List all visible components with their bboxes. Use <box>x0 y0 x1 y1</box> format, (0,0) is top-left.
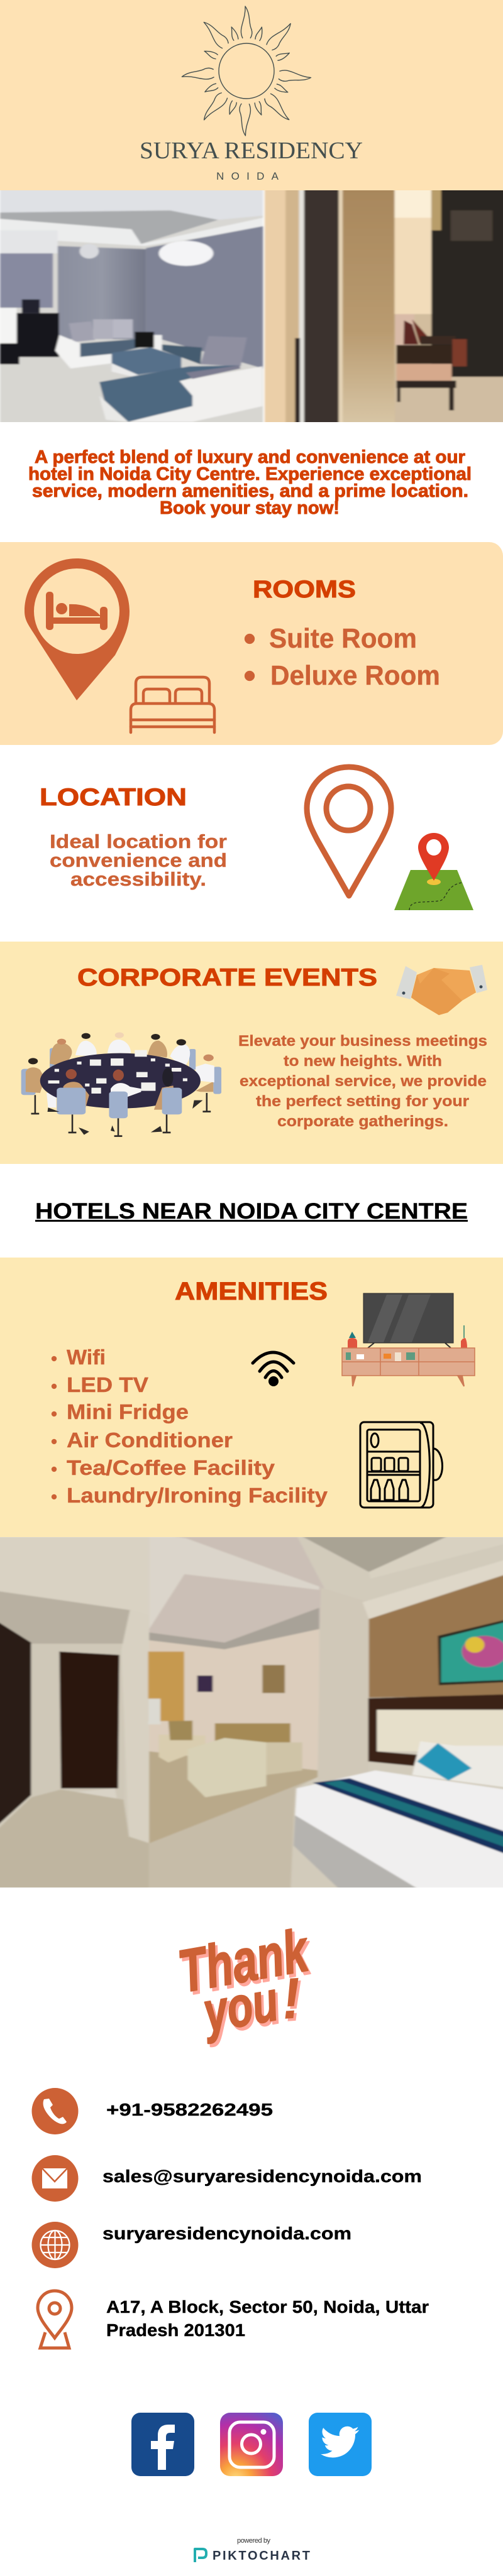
amenities list: Tea/Coffee Facility <box>67 1456 275 1479</box>
intro paragraph: hotel in Noida City Centre. Experience exceptional <box>28 464 472 484</box>
contact: phone: +91-9582262495 <box>106 2100 273 2119</box>
heading: location: LOCATION <box>40 784 187 811</box>
panel: location <box>40 767 473 910</box>
thank you lettering: ! <box>282 1969 306 2034</box>
icon: instagram <box>220 2413 283 2476</box>
panel: rooms <box>0 542 503 745</box>
photo: hotel corridor <box>265 188 503 425</box>
header band <box>0 0 503 190</box>
amenities list: Wifi <box>67 1345 106 1369</box>
contact: address: A17, A Block, Sector 50, Noida, Uttar <box>106 2297 429 2317</box>
thank you lettering: ! <box>279 1966 303 2031</box>
footer: powered by piktochart <box>195 2537 310 2563</box>
icon: map with red pin <box>394 833 473 910</box>
heading: rooms: ROOMS <box>253 576 356 603</box>
thank you lettering: Thank <box>176 1920 318 2009</box>
contact: phone <box>31 2088 273 2134</box>
corporate events description <box>238 1033 487 1130</box>
intro paragraph <box>28 447 472 518</box>
footer: powered by piktochart: PIKTOCHART <box>213 2549 310 2563</box>
amenities list: Laundry/Ironing Facility <box>67 1484 328 1507</box>
icon: large pin outline <box>307 767 391 896</box>
footer: powered by piktochart: powered by <box>237 2537 270 2545</box>
icon: sun logo <box>182 6 311 136</box>
location description: Ideal location for <box>50 830 227 852</box>
thank you lettering: you <box>199 1973 285 2048</box>
corporate events description: the perfect setting for your <box>256 1093 469 1110</box>
thank you lettering: Thank <box>174 1916 315 2006</box>
thank you lettering <box>174 1916 318 2048</box>
photo: hotel lobby <box>0 188 263 425</box>
amenities list <box>52 1345 328 1507</box>
corporate events description: corporate gatherings. <box>277 1113 448 1130</box>
intro paragraph: A perfect blend of luxury and convenience at our <box>35 447 465 467</box>
contact: email: sales@suryaresidencynoida.com <box>102 2166 422 2186</box>
logo subtitle: NOIDA <box>216 170 279 182</box>
icon: wifi <box>253 1352 294 1386</box>
icon: bed location pin <box>25 558 130 700</box>
icon: twitter <box>309 2413 372 2476</box>
panel: amenities <box>0 1258 503 1537</box>
amenities list: Air Conditioner <box>67 1428 233 1452</box>
location description: convenience and <box>50 849 227 871</box>
location description <box>50 830 227 890</box>
contact: address <box>38 2291 429 2348</box>
illustration: meeting table <box>21 1032 221 1137</box>
icon: facebook <box>131 2413 194 2476</box>
corporate events description: to new heights. With <box>284 1053 442 1070</box>
contact: email <box>31 2155 422 2202</box>
logo name: SURYA RESIDENCY <box>140 138 363 164</box>
amenities list: LED TV <box>67 1373 148 1396</box>
room list <box>245 623 440 691</box>
heading: amenities: AMENITIES <box>175 1278 328 1305</box>
icon: tv on cabinet <box>342 1293 475 1386</box>
icon: handshake <box>396 965 487 1015</box>
amenities list: Mini Fridge <box>67 1400 189 1423</box>
photo: suite room <box>0 1533 503 1896</box>
table top <box>40 1053 201 1109</box>
contact: website: suryaresidencynoida.com <box>102 2224 351 2243</box>
thank you lettering: you <box>197 1970 283 2045</box>
room list: Deluxe Room <box>270 660 440 691</box>
corporate events description: Elevate your business meetings <box>238 1033 487 1050</box>
corporate events description: exceptional service, we provide <box>240 1073 487 1090</box>
contact: address: Pradesh 201301 <box>106 2320 245 2340</box>
intro paragraph: Book your stay now! <box>160 498 340 518</box>
contact: website <box>31 2222 351 2268</box>
icon: double bed outline <box>131 677 214 732</box>
heading: corporate events: CORPORATE EVENTS <box>77 964 377 991</box>
icon: mini fridge <box>360 1422 443 1508</box>
room list: Suite Room <box>269 623 417 654</box>
intro paragraph: service, modern amenities, and a prime location. <box>32 481 468 501</box>
panel: corporate events <box>0 942 503 1164</box>
heading: hotels near noida city centre: HOTELS NEAR NOIDA CITY CENTRE <box>35 1199 468 1224</box>
location description: accessibility. <box>70 868 206 890</box>
